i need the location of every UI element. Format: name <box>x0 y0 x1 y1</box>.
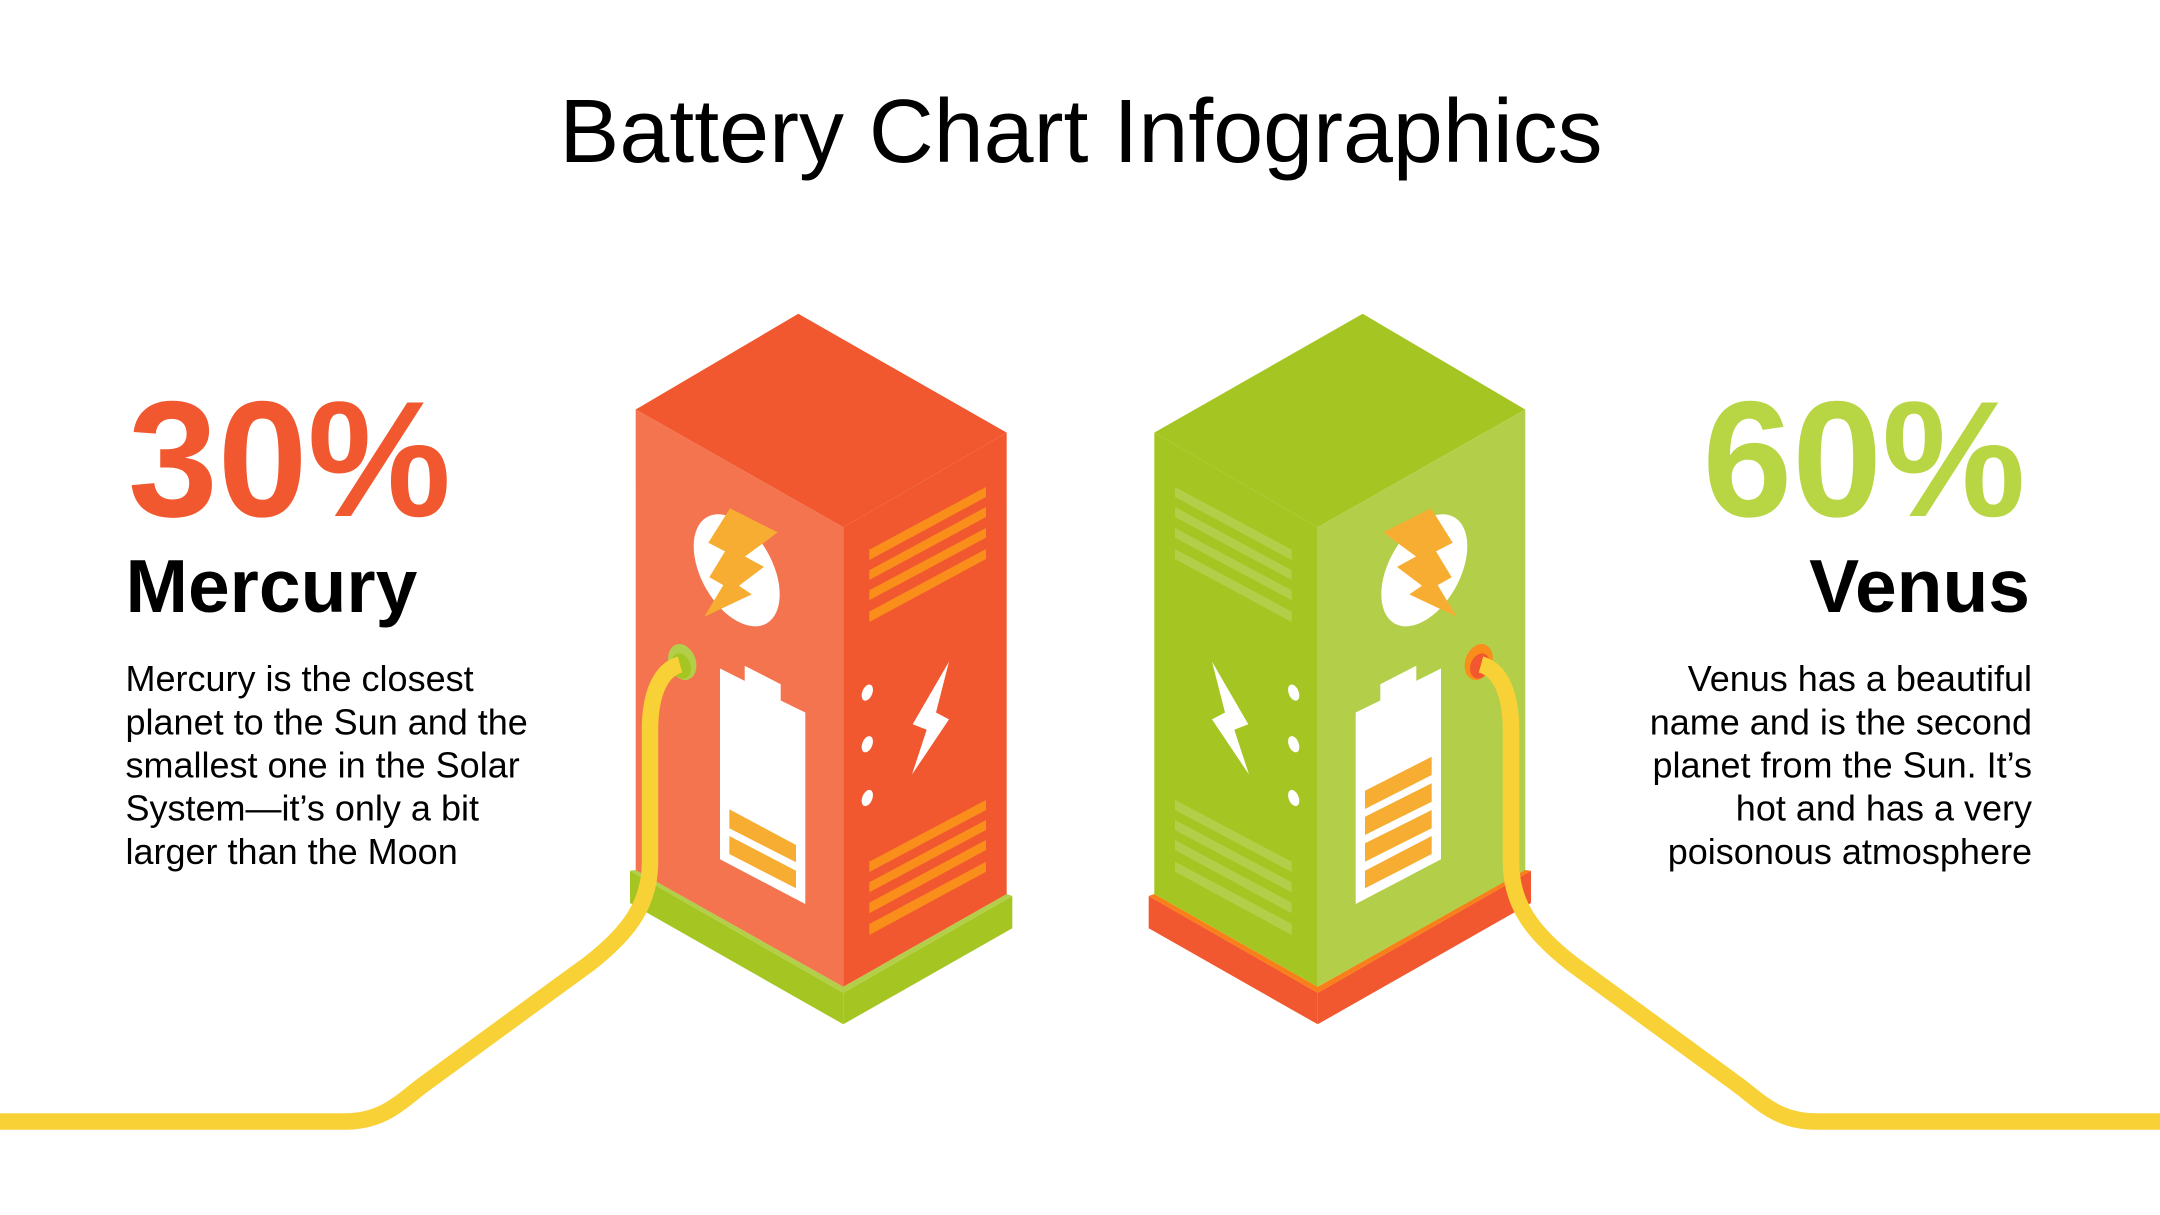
upper vents <box>869 487 986 622</box>
panel: Venus text <box>1650 367 2032 872</box>
lower vents <box>869 800 986 935</box>
socket <box>663 640 701 684</box>
description: Venus: planet from the Sun. It’s <box>1652 744 2032 786</box>
side face <box>1154 433 1318 987</box>
description: Mercury: planet to the Sun and the <box>126 702 528 742</box>
description: Mercury: smallest one in the Solar <box>126 744 520 786</box>
icon: white bolt <box>1212 662 1249 774</box>
description: Venus: name and is the second <box>1650 702 2032 742</box>
upper vents <box>1175 487 1292 622</box>
title: Battery Chart Infographics <box>559 82 1603 182</box>
socket <box>1460 640 1498 684</box>
battery: Venus 60% <box>1149 314 2160 1122</box>
description: Venus: poisonous atmosphere <box>1668 831 2032 872</box>
cable <box>0 664 680 1122</box>
left face <box>636 410 843 987</box>
right face <box>843 433 1007 987</box>
icon: white bolt <box>912 662 949 774</box>
heading: Venus: Venus <box>1809 544 2030 628</box>
base plate <box>630 870 1012 1024</box>
description: Mercury: System—it’s only a bit <box>126 788 479 828</box>
lower vents <box>1175 800 1292 935</box>
battery: Mercury 30% <box>0 314 1012 1122</box>
front face <box>1318 410 1525 987</box>
indicator dots <box>859 683 875 808</box>
icon: oval with bolt <box>694 496 780 645</box>
description: Venus: hot and has a very <box>1736 788 2032 828</box>
value: 30%: 30% <box>128 367 451 551</box>
description: Mercury: Mercury is the closest <box>126 658 474 699</box>
top face <box>636 314 1007 527</box>
description: Mercury: larger than the Moon <box>126 831 458 872</box>
base plate <box>1149 870 1531 1024</box>
icon: battery level <box>720 666 805 904</box>
icon: oval with bolt <box>1381 496 1467 645</box>
cable <box>1481 664 2160 1122</box>
heading: Mercury: Mercury <box>126 544 418 628</box>
description: Venus: Venus has a beautiful <box>1688 658 2032 699</box>
top face <box>1154 314 1525 527</box>
panel: Mercury text <box>126 367 528 872</box>
indicator dots <box>1286 683 1302 808</box>
icon: battery level <box>1356 666 1441 904</box>
value: 60%: 60% <box>1702 367 2026 551</box>
